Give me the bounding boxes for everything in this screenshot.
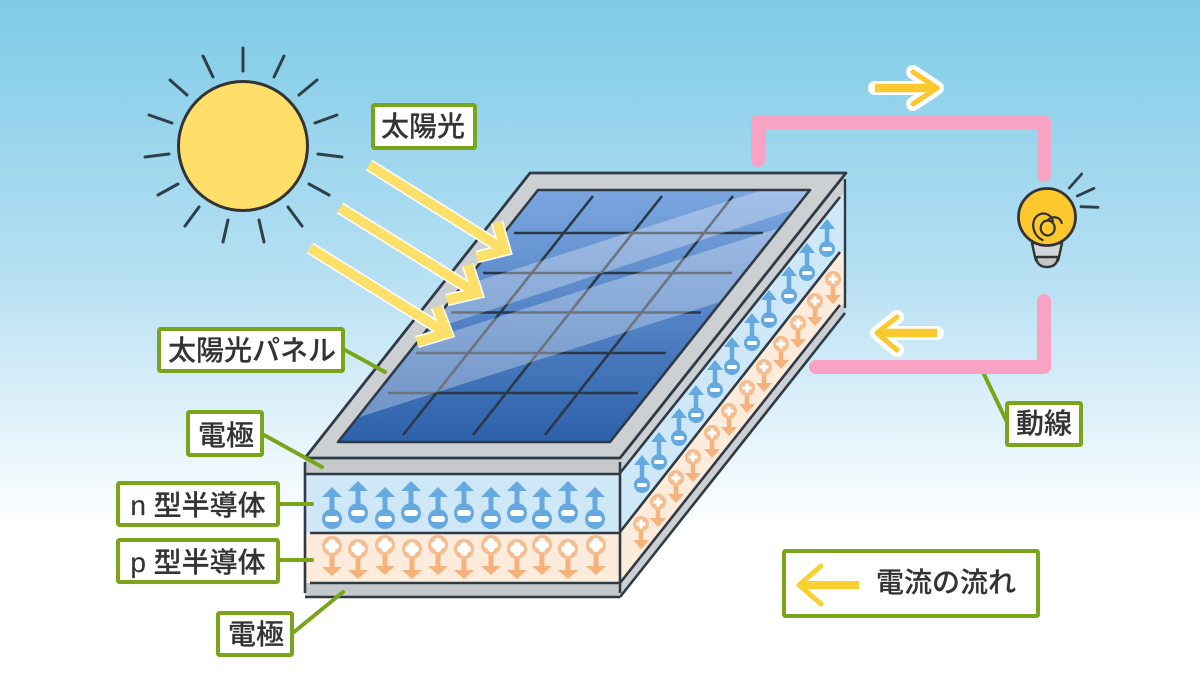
- label: n-type semiconductor: n 型半導体: [130, 490, 266, 521]
- label: solar panel: [159, 329, 343, 371]
- label: solar panel: 太陽光パネル: [168, 335, 336, 366]
- pink conductor wire: [758, 122, 1044, 367]
- arrow: current right: [875, 72, 937, 104]
- side face of stack: [620, 173, 846, 597]
- label: bottom electrode: 電極: [228, 619, 284, 650]
- label: top electrode: [188, 412, 262, 455]
- sunlight arrows: [310, 165, 505, 342]
- label: p-type semiconductor: p 型半導体: [130, 547, 266, 578]
- label: sunlight: 太陽光: [381, 111, 465, 142]
- label: p-type semiconductor: [118, 540, 278, 582]
- front face of stack: [305, 458, 620, 597]
- icon: light bulb: [1018, 174, 1098, 267]
- icon: sun: [145, 48, 342, 242]
- label: sunlight: [373, 105, 475, 148]
- label: top electrode: 電極: [198, 420, 254, 451]
- label: n-type semiconductor: [118, 483, 278, 525]
- top frame: [305, 173, 846, 458]
- label: conductor: 動線: [1016, 408, 1072, 439]
- label leader lines: [264, 350, 1006, 632]
- legend: current flow: 電流の流れ: [876, 567, 1016, 598]
- panel glass: [336, 188, 812, 444]
- legend: current flow: [784, 551, 1038, 616]
- label: conductor: [1007, 403, 1081, 445]
- solar cell stack: [300, 162, 850, 597]
- label: bottom electrode: [218, 613, 292, 655]
- arrow: current left: [877, 317, 937, 350]
